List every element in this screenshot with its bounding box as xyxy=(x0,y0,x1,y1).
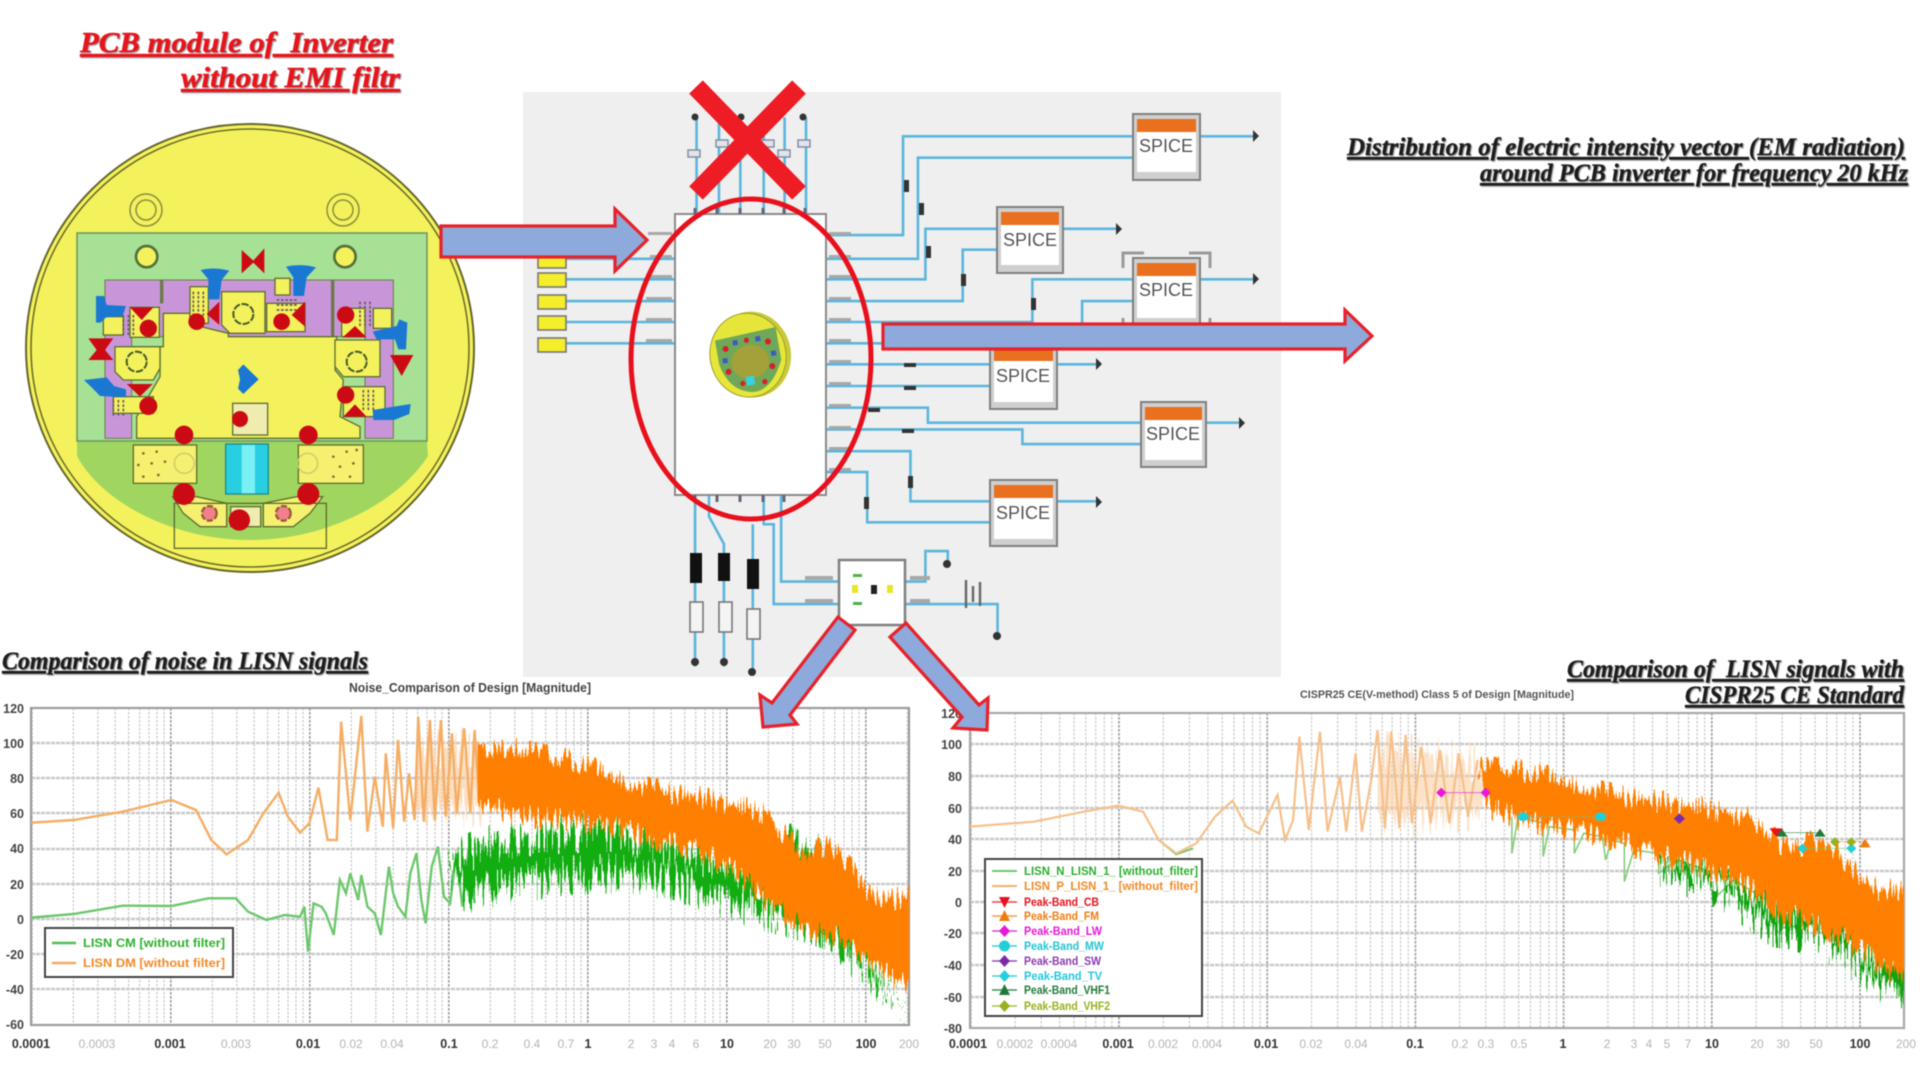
x axis labels: 0.0002 xyxy=(997,1037,1034,1051)
legend xyxy=(45,928,233,977)
y axis labels: 120 xyxy=(941,707,962,721)
chart title: Noise_Comparison of Design [Magnitude] xyxy=(349,680,591,695)
heading: electric intensity distribution xyxy=(1346,134,1908,187)
small gate drive parts xyxy=(113,292,373,417)
PCB module xyxy=(26,124,474,572)
pin labels xyxy=(646,232,930,603)
x axis labels: 0.0003 xyxy=(79,1037,116,1051)
legend: Peak-Band_CB xyxy=(1024,897,1099,909)
x axis labels: 50 xyxy=(1809,1037,1823,1051)
x axis labels: 0.003 xyxy=(221,1037,251,1051)
y axis labels: 80 xyxy=(948,770,962,784)
x axis labels: 2 xyxy=(628,1037,635,1051)
x axis labels: 0.01 xyxy=(296,1037,320,1051)
battery source xyxy=(966,580,980,608)
legend: LISN_P_LISN_1_ [without_filter] xyxy=(1024,881,1198,893)
pad rings xyxy=(127,304,367,372)
y axis labels: 60 xyxy=(948,802,962,816)
x axis labels: 1 xyxy=(1560,1037,1567,1051)
x axis labels: 4 xyxy=(669,1037,676,1051)
inverter IC block xyxy=(675,208,826,502)
PCB components xyxy=(84,246,413,548)
legend: Peak-Band_VHF1 xyxy=(1024,985,1111,997)
y axis labels: 0 xyxy=(955,896,962,910)
panel: circuit schematic background xyxy=(523,92,1281,677)
SPICE block 5 xyxy=(1141,402,1206,467)
y axis labels: 40 xyxy=(10,842,24,856)
chart: noise comparison xyxy=(3,680,919,1051)
x axis labels: 0.02 xyxy=(1299,1037,1323,1051)
wires xyxy=(566,117,1254,670)
x axis labels xyxy=(949,1037,1916,1051)
y axis labels: 20 xyxy=(948,865,962,879)
x axis labels: 100 xyxy=(1850,1037,1870,1051)
heading: PCB module xyxy=(79,27,401,94)
x axis labels xyxy=(12,1037,919,1051)
x axis labels: 0.002 xyxy=(1148,1037,1178,1051)
x axis labels: 6 xyxy=(693,1037,700,1051)
x axis labels: 2 xyxy=(1604,1037,1611,1051)
y axis labels: 40 xyxy=(948,833,962,847)
x axis labels: 20 xyxy=(763,1037,777,1051)
yellow mounting holes xyxy=(136,246,356,267)
SPICE block 2: SPICE xyxy=(1003,230,1057,250)
SPICE block 6: SPICE xyxy=(996,503,1050,523)
board outline xyxy=(26,124,474,572)
legend: Peak-Band_SW xyxy=(1024,956,1101,968)
x axis labels: 100 xyxy=(856,1037,876,1051)
x axis labels: 0.0001 xyxy=(949,1037,987,1051)
filter capacitors at the top xyxy=(688,140,810,157)
y axis labels: -40 xyxy=(6,983,24,997)
heading: CISPR25 comparison: CISPR25 CE Standard xyxy=(1685,682,1904,709)
red cross over removed filter xyxy=(696,87,799,193)
heading: CISPR25 comparison xyxy=(1567,656,1904,709)
x axis labels: 0.2 xyxy=(1452,1037,1469,1051)
x axis labels: 5 xyxy=(1664,1037,1671,1051)
legend: LISN CM [without filter] xyxy=(83,938,225,950)
y axis labels: -80 xyxy=(944,1022,962,1036)
x axis labels: 0.4 xyxy=(524,1037,541,1051)
legend: Peak-Band_MW xyxy=(1024,941,1104,953)
central yellow area xyxy=(137,313,360,438)
mounting rings xyxy=(130,194,359,226)
x axis labels: 0.04 xyxy=(1344,1037,1368,1051)
LISN N green trace xyxy=(1159,817,1915,993)
LISN CM green trace xyxy=(31,832,912,1007)
blue components xyxy=(84,265,411,420)
chart: CISPR25 comparison xyxy=(941,689,1918,1051)
x axis labels: 20 xyxy=(1750,1037,1764,1051)
x axis labels: 0.1 xyxy=(1406,1037,1424,1051)
y axis labels: 20 xyxy=(10,878,24,892)
arrow: PCB to schematic xyxy=(441,209,647,271)
legend: Peak-Band_TV xyxy=(1024,971,1102,983)
SPICE block 1: SPICE xyxy=(1139,136,1193,156)
heading: electric intensity distribution: Distribution of electric intensity vector (EM radiation) xyxy=(1346,134,1905,161)
x axis labels: 0.04 xyxy=(380,1037,404,1051)
x axis labels: 0.0004 xyxy=(1041,1037,1078,1051)
x axis labels: 0.7 xyxy=(558,1037,575,1051)
y axis labels: 0 xyxy=(17,913,24,927)
y axis labels xyxy=(941,707,962,1036)
x axis labels: 50 xyxy=(818,1037,832,1051)
heading: CISPR25 comparison: Comparison of LISN signals with xyxy=(1567,656,1904,683)
bottom rings xyxy=(202,506,291,521)
lower green area xyxy=(77,440,428,540)
SPICE block 1 xyxy=(1133,114,1200,180)
y axis labels: -20 xyxy=(944,927,962,941)
arrow: filter block to noise chart xyxy=(760,617,855,727)
mini PCB model xyxy=(703,305,798,404)
cyan capacitor xyxy=(226,444,268,494)
data traces xyxy=(31,716,916,1007)
arrow: filter block to CISPR chart xyxy=(890,623,988,730)
x axis labels: 30 xyxy=(1776,1037,1790,1051)
legend: LISN DM [without filter] xyxy=(83,958,225,970)
filter block xyxy=(839,560,905,625)
y axis labels: -20 xyxy=(6,948,24,962)
heading: PCB module: PCB module of Inverter xyxy=(79,27,394,59)
y axis labels: 120 xyxy=(3,702,24,716)
legend: Peak-Band_LW xyxy=(1024,926,1102,938)
heading: noise comparison: Comparison of noise in LISN signals xyxy=(2,648,368,675)
y axis labels: 80 xyxy=(10,772,24,786)
x axis labels: 7 xyxy=(1685,1037,1692,1051)
x axis labels: 200 xyxy=(1896,1037,1916,1051)
schematic: circuit diagram xyxy=(538,114,1259,676)
purple copper areas xyxy=(105,280,393,438)
x axis labels: 0.1 xyxy=(440,1037,458,1051)
component markers on wires xyxy=(691,114,1259,676)
plot grid xyxy=(31,708,909,1025)
x axis labels: 0.02 xyxy=(339,1037,363,1051)
x axis labels: 0.0001 xyxy=(12,1037,50,1051)
plot grid xyxy=(970,713,1904,1028)
arrow: schematic to field distribution xyxy=(883,310,1372,361)
y axis labels: 100 xyxy=(3,737,24,751)
x axis labels: 0.3 xyxy=(1478,1037,1495,1051)
x axis labels: 10 xyxy=(720,1037,734,1051)
SPICE block 3 with selection brackets: SPICE xyxy=(1139,280,1193,300)
SPICE block 3 with selection brackets xyxy=(1123,253,1210,326)
chart title: CISPR25 CE(V-method) Class 5 of Design [Magnitude] xyxy=(1300,689,1574,701)
SPICE block 5: SPICE xyxy=(1146,424,1200,444)
x axis labels: 3 xyxy=(1631,1037,1638,1051)
inductors and resistors xyxy=(690,553,760,639)
y axis labels xyxy=(3,702,24,1032)
LISN DM orange trace xyxy=(31,716,916,987)
legend: LISN_N_LISN_1_ [without_filter] xyxy=(1024,866,1198,878)
data traces xyxy=(970,730,1918,993)
legend: Peak-Band_FM xyxy=(1024,911,1099,923)
SPICE block 4: SPICE xyxy=(996,366,1050,386)
SPICE block 6 xyxy=(990,480,1057,546)
x axis labels: 30 xyxy=(787,1037,801,1051)
x axis labels: 4 xyxy=(1646,1037,1653,1051)
x axis labels: 1 xyxy=(585,1037,592,1051)
x axis labels: 0.004 xyxy=(1192,1037,1222,1051)
y axis labels: -60 xyxy=(6,1018,24,1032)
y axis labels: -40 xyxy=(944,959,962,973)
legend: Peak-Band_VHF2 xyxy=(1024,1001,1110,1013)
heading: electric intensity distribution: around PCB inverter for frequency 20 kHz xyxy=(1480,160,1908,187)
switch pads xyxy=(103,278,392,417)
green board xyxy=(77,233,427,441)
x axis labels: 0.001 xyxy=(1102,1037,1134,1051)
y axis labels: 60 xyxy=(10,807,24,821)
bottom pads xyxy=(133,403,363,527)
legend xyxy=(985,859,1202,1016)
y axis labels: 100 xyxy=(941,738,962,752)
x axis labels: 10 xyxy=(1705,1037,1719,1051)
x axis labels: 200 xyxy=(899,1037,919,1051)
peak limit markers xyxy=(1436,788,1871,853)
x axis labels: 0.2 xyxy=(482,1037,499,1051)
outline of lower connector xyxy=(174,503,326,548)
x axis labels: 0.001 xyxy=(154,1037,186,1051)
red ellipse highlight xyxy=(631,199,871,519)
x axis labels: 0.5 xyxy=(1511,1037,1528,1051)
heading: PCB module: without EMI filtr xyxy=(181,62,401,94)
SPICE block 2 xyxy=(997,207,1063,273)
yellow input ports xyxy=(538,254,566,352)
solder dots xyxy=(137,449,358,478)
x axis labels: 0.01 xyxy=(1254,1037,1278,1051)
x axis labels: 3 xyxy=(651,1037,658,1051)
y axis labels: -60 xyxy=(944,991,962,1005)
LISN P orange trace xyxy=(970,730,1918,977)
SPICE block 4 xyxy=(990,343,1057,409)
red diodes and transistors xyxy=(88,248,413,531)
